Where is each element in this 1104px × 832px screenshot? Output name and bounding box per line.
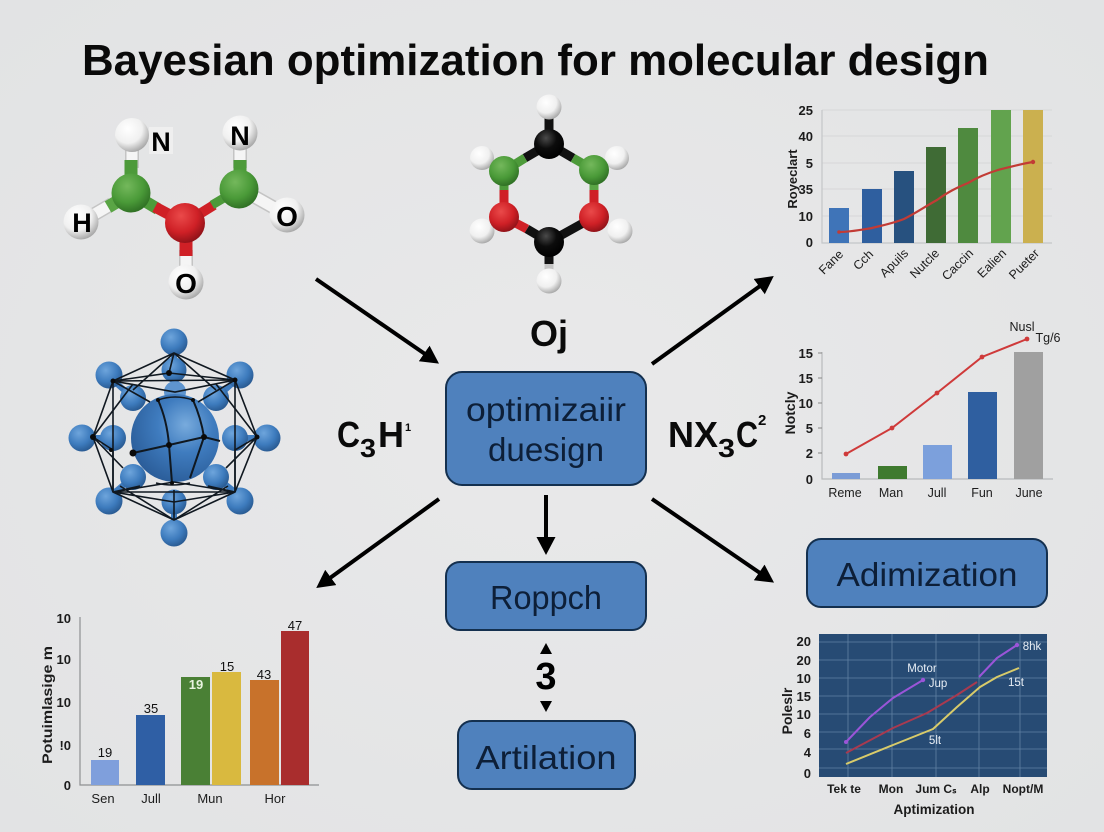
box: Artilation (458, 721, 635, 789)
chart: top right bars with line: Pueter (1006, 246, 1042, 282)
formula: C3H1: C (337, 414, 360, 455)
chart: middle right bars with line: Fun (971, 486, 993, 500)
chart: bottom left labelled bars: 0 (64, 778, 71, 793)
formula: C3H1 (337, 414, 411, 463)
formula: Oj: Oj (530, 313, 568, 354)
molecule: left ball-and-stick: N (151, 127, 171, 157)
chart: top right bars with line: Royeclart (785, 149, 800, 209)
chart: bottom right line chart on dark panel: 20 (797, 634, 811, 649)
chart: top right bars with line (785, 103, 1052, 283)
molecule: ring ball-and-stick (470, 94, 632, 294)
chart: bottom right line chart on dark panel: Motor (907, 663, 937, 675)
chart: top right bars with line: 35 (799, 182, 813, 197)
chart: bottom right line chart on dark panel: 0 (804, 766, 811, 781)
formula: C3H1: 1 (405, 422, 411, 434)
chart: bottom left labelled bars: 19 (98, 745, 112, 760)
title: Bayesian optimization for molecular design (82, 36, 989, 85)
box: optimizair duesign: duesign (488, 431, 604, 468)
chart: middle right bars with line: 2 (806, 446, 813, 461)
chart: middle right bars with line: 15 (799, 371, 813, 386)
chart: bottom right line chart on dark panel: 6 (804, 726, 811, 741)
chart: middle right bars with line: Reme (828, 486, 862, 500)
chart: bottom left labelled bars: Potuimlasige m (39, 646, 55, 764)
chart: bottom left labelled bars: 15 (220, 659, 234, 674)
formula: NX3C2 (668, 412, 766, 463)
arrow: center to bottom-left chart (330, 499, 439, 578)
chart: bottom left labelled bars: Jull (141, 791, 161, 806)
chart: bottom left labelled bars (39, 611, 319, 806)
chart: top right bars with line: Cch (850, 247, 876, 273)
chart: bottom right line chart on dark panel: 15 (797, 689, 811, 704)
chart: bottom right line chart on dark panel: 10 (797, 707, 811, 722)
chart: bottom left labelled bars: Mun (197, 791, 223, 806)
arrow: center to Adimization (652, 499, 760, 573)
chart: bottom right line chart on dark panel: Aptimization (894, 802, 974, 817)
box: Roppch: Roppch (490, 579, 602, 616)
chart: bottom right line chart on dark panel: Jum Cₛ (915, 782, 957, 796)
formula: NX3C2: 2 (758, 412, 766, 429)
chart: bottom right line chart on dark panel: 8hk (1023, 641, 1042, 653)
chart: top right bars with line: Caccin (939, 246, 976, 283)
chart: top right bars with line: Ealien (975, 246, 1009, 281)
chart: bottom right line chart on dark panel: 5lt (929, 735, 942, 747)
chart: bottom left labelled bars: 10 (57, 611, 71, 626)
chart: middle right bars with line: 10 (799, 396, 813, 411)
chart: bottom right line chart on dark panel (779, 634, 1047, 817)
molecule: left ball-and-stick: O (175, 268, 197, 299)
molecule: left ball-and-stick (64, 116, 304, 300)
chart: bottom left labelled bars: Sen (91, 791, 115, 806)
chart: middle right bars with line: Tg/6 (1035, 331, 1061, 345)
chart: bottom right line chart on dark panel: Alp (970, 782, 990, 796)
chart: bottom right line chart on dark panel: Tek te (827, 782, 861, 796)
chart: bottom right line chart on dark panel: 20 (797, 653, 811, 668)
chart: bottom left labelled bars: 19 (189, 677, 203, 692)
chart: top right bars with line: 10 (799, 209, 813, 224)
chart: middle right bars with line: Nusl (1009, 320, 1035, 334)
chart: middle right bars with line: Notcly (782, 391, 798, 434)
box: Adimization: Adimization (836, 556, 1018, 593)
chart: bottom left labelled bars: !0 (59, 738, 71, 753)
formula: C3H1: H (378, 414, 404, 455)
chart: bottom right line chart on dark panel: Poleslr (779, 687, 795, 734)
box: Artilation: Artilation (476, 739, 616, 776)
chart: middle right bars with line: Jull (928, 486, 946, 500)
chart: top right bars with line: 25 (799, 103, 813, 118)
box: Adimization (807, 539, 1047, 607)
chart: middle right bars with line: 5 (806, 421, 813, 436)
molecule: left ball-and-stick: H (72, 208, 92, 238)
arrow: center to top chart (652, 286, 760, 364)
chart: middle right bars with line: Man (879, 486, 903, 500)
arrow: molecule to center (316, 279, 425, 354)
chart: top right bars with line: Apuils (877, 246, 911, 280)
chart: bottom left labelled bars: 35 (144, 701, 158, 716)
chart: middle right bars with line: 0 (806, 472, 813, 487)
chart: top right bars with line: Fane (816, 247, 846, 277)
chart: bottom left labelled bars: 43 (257, 667, 271, 682)
connector: 3 with up and down triangles (535, 643, 557, 712)
chart: bottom right line chart on dark panel: Mon (879, 782, 903, 796)
molecule: blue cage cluster (68, 328, 280, 546)
formula: C3H1: 3 (360, 433, 376, 463)
chart: middle right bars with line: 15 (799, 346, 813, 361)
chart: bottom left labelled bars: Hor (265, 791, 286, 806)
molecule: left ball-and-stick: N (230, 121, 250, 151)
chart: bottom right line chart on dark panel: 10 (797, 671, 811, 686)
chart: bottom right line chart on dark panel: Jup (929, 678, 947, 690)
chart: top right bars with line: 5 (806, 156, 813, 171)
chart: bottom right line chart on dark panel: 4 (804, 745, 812, 760)
chart: top right bars with line: Nutcle (907, 246, 942, 281)
box: Roppch (446, 562, 646, 630)
chart: top right bars with line: 0 (806, 235, 813, 250)
chart: bottom left labelled bars: 10 (57, 695, 71, 710)
chart: bottom left labelled bars: 47 (288, 618, 302, 633)
chart: bottom right line chart on dark panel: 15t (1008, 677, 1025, 689)
molecule: left ball-and-stick: O (276, 201, 298, 232)
box: optimizair duesign: optimizaiir (466, 391, 626, 428)
connector: 3 with up and down triangles: 3 (535, 656, 557, 698)
chart: top right bars with line: 40 (799, 129, 813, 144)
formula: NX3C2: C (736, 414, 758, 455)
chart: bottom right line chart on dark panel: Nopt/M (1003, 782, 1043, 796)
chart: middle right bars with line (782, 320, 1061, 500)
formula: NX3C2: 3 (718, 433, 735, 463)
box: optimizair duesign (446, 372, 646, 485)
chart: bottom left labelled bars: 10 (57, 652, 71, 667)
arrow: center to Roppch (544, 495, 548, 538)
chart: middle right bars with line: June (1015, 486, 1043, 500)
formula: NX3C2: NX (668, 414, 718, 455)
